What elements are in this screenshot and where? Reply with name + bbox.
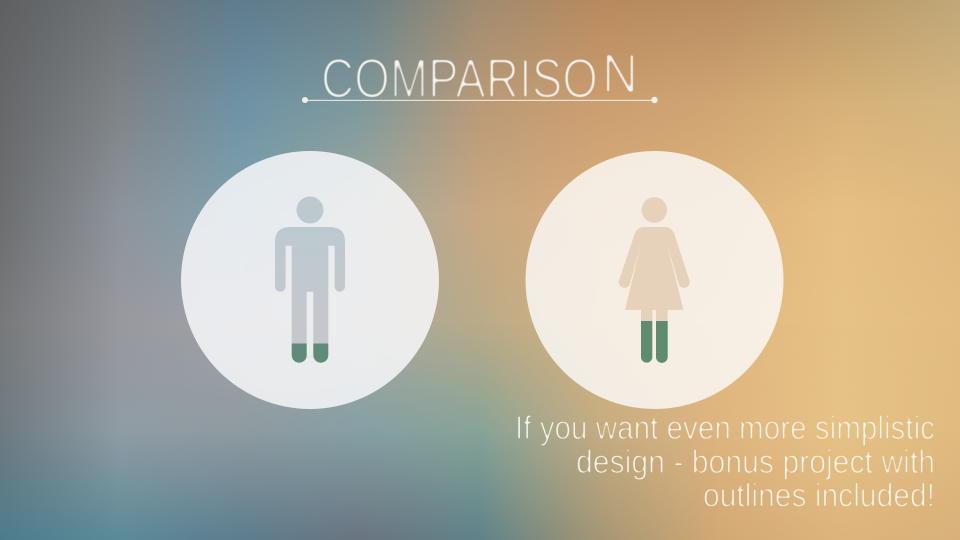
panel: female figure circle [526, 151, 784, 409]
title text: COMPARISO [321, 46, 598, 110]
text block: bonus project note [515, 409, 935, 514]
text block: bonus project note: design - bonus project with [576, 443, 935, 480]
icon: man [275, 196, 345, 363]
title text: N [602, 42, 638, 104]
text block: bonus project note: outlines included! [703, 476, 935, 514]
icon: woman [619, 197, 690, 363]
woman's green boots [641, 321, 668, 363]
man's green feet [292, 344, 328, 363]
title underline with end dots [302, 97, 658, 103]
title: COMPARISON with underline [302, 42, 658, 110]
panel: male figure circle [181, 151, 439, 409]
